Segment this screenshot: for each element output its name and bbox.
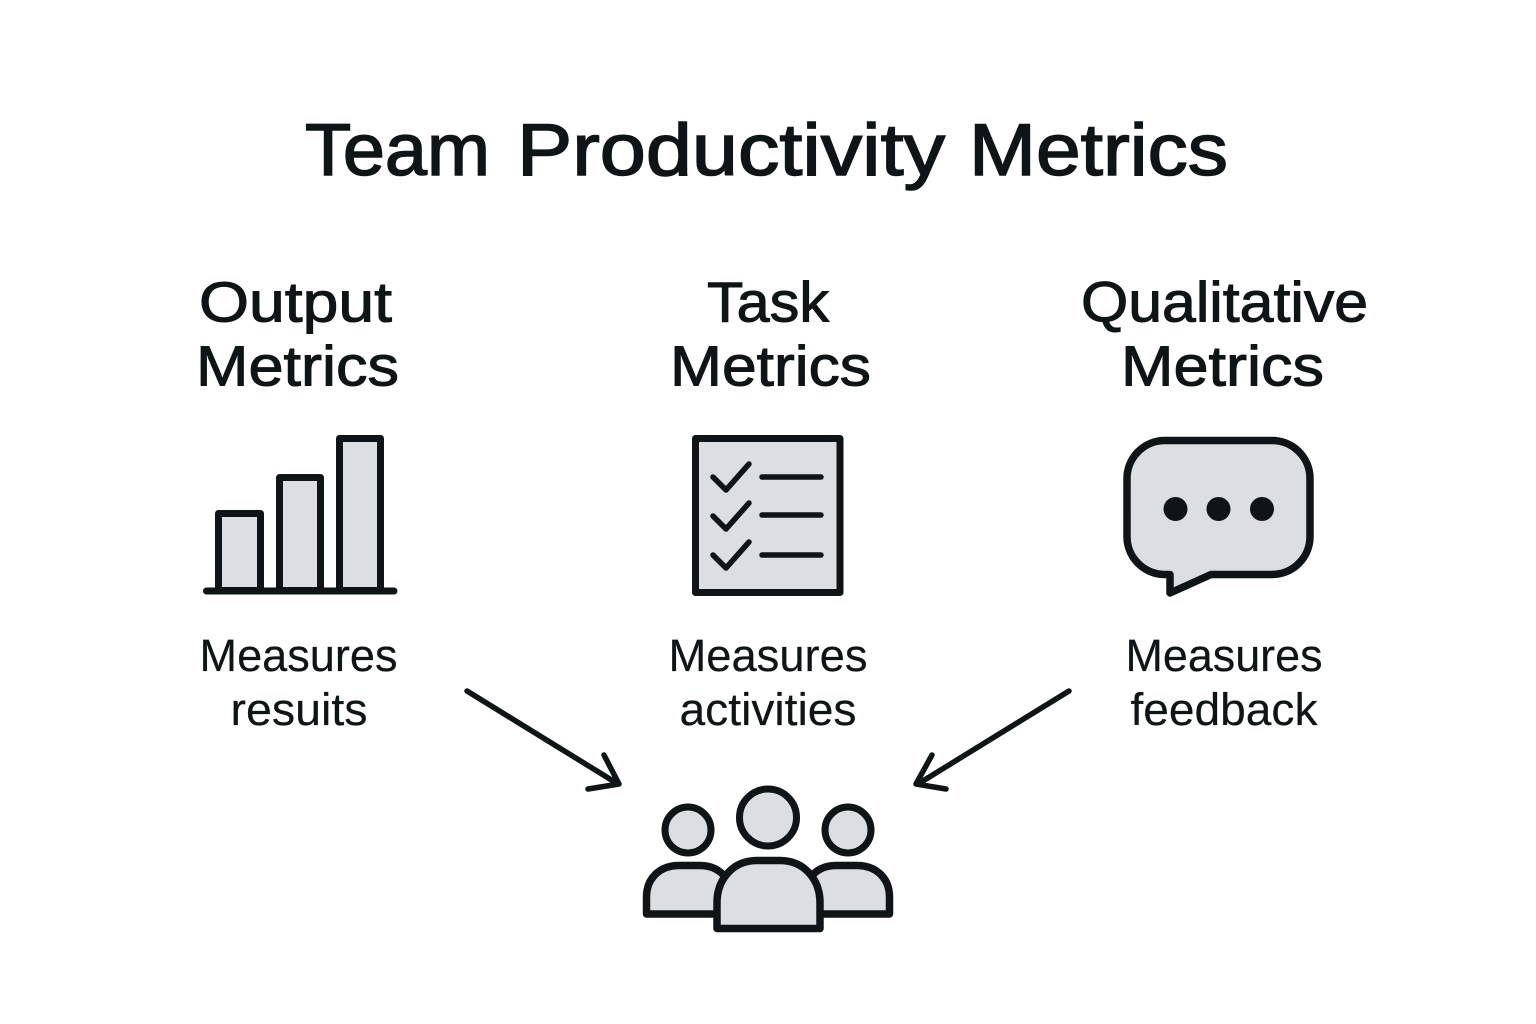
description: measures results	[200, 630, 398, 735]
heading: output metrics	[196, 270, 399, 398]
icon: speech bubble	[1127, 440, 1310, 593]
panel: task metrics	[668, 270, 871, 735]
icon: checklist	[696, 438, 840, 592]
description: measures activities: Measures	[668, 630, 868, 681]
heading: output metrics: Metrics	[196, 334, 399, 398]
description: measures results: resuits	[230, 684, 368, 735]
title: Productivity	[517, 110, 946, 191]
heading: task metrics: Metrics	[670, 334, 871, 398]
heading: qualitative metrics: Qualitative	[1081, 270, 1368, 334]
description: measures results: Measures	[200, 630, 398, 681]
title	[305, 110, 1228, 191]
arrow: output to team	[467, 691, 619, 789]
description: measures activities	[668, 630, 868, 735]
heading: output metrics: Output	[199, 270, 392, 334]
heading: qualitative metrics	[1081, 270, 1368, 398]
icon: bar chart	[206, 438, 394, 591]
description: measures feedback: feedback	[1130, 684, 1318, 735]
panel: qualitative metrics	[1081, 270, 1368, 735]
description: measures feedback: Measures	[1126, 630, 1322, 681]
arrow: qualitative to team	[916, 691, 1069, 789]
panel: output metrics	[196, 270, 399, 735]
icon: team of three people	[646, 789, 890, 928]
description: measures activities: activities	[680, 684, 856, 735]
heading: task metrics	[670, 270, 871, 398]
title: Metrics	[969, 110, 1228, 191]
title: Team	[305, 110, 490, 191]
heading: qualitative metrics: Metrics	[1121, 334, 1324, 398]
heading: task metrics: Task	[707, 270, 830, 334]
description: measures feedback	[1126, 630, 1322, 735]
